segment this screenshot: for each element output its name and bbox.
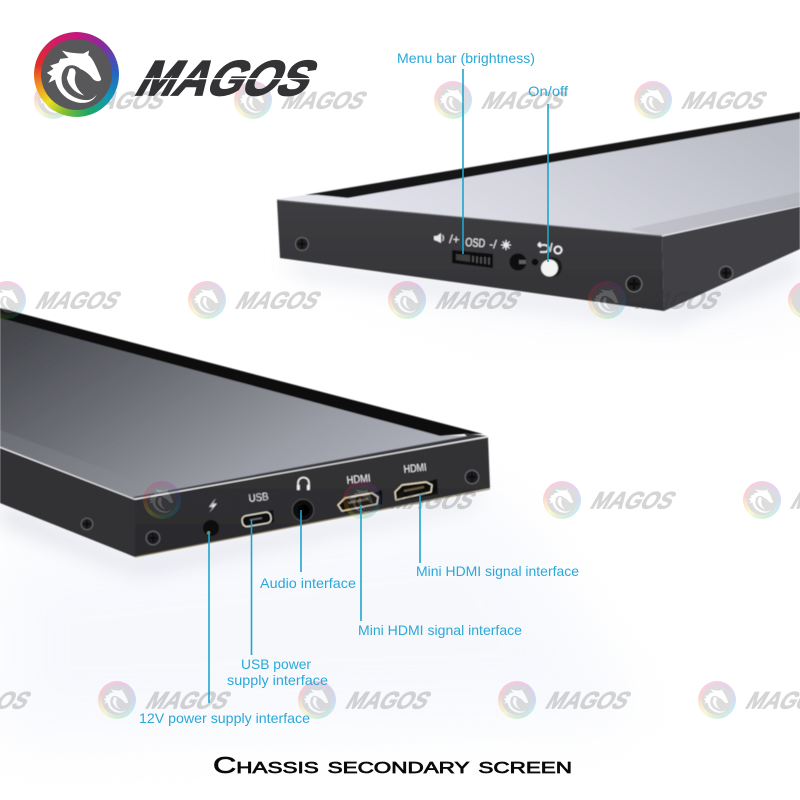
USB label: USB xyxy=(248,491,269,505)
title: Chassis secondary screen xyxy=(213,752,572,778)
top device: black bezel strip xyxy=(305,112,800,198)
watermark row 1, logo 4: MAGOS xyxy=(677,88,772,114)
watermark row 1, logo 2 xyxy=(234,81,372,119)
micro USB port xyxy=(241,510,274,528)
screw left xyxy=(146,531,160,545)
watermark row 4, logo 2: MAGOS xyxy=(141,688,236,714)
bottom device: corner frame xyxy=(133,433,487,499)
callout: USB power: USB power xyxy=(241,656,311,672)
mini HDMI port right xyxy=(395,479,438,501)
watermark row 3, logo 2 xyxy=(343,481,481,519)
minus slash text: -/ xyxy=(489,237,498,252)
callout: audio: Audio interface xyxy=(260,575,356,591)
watermark row 3, logo 2: MAGOS xyxy=(386,488,481,514)
callout: USB power: supply interface xyxy=(227,672,328,688)
OSD slider wheel xyxy=(452,250,493,268)
top device xyxy=(277,112,800,311)
audio jack xyxy=(291,498,315,522)
callout: mini HDMI 1: Mini HDMI signal interface xyxy=(358,622,522,638)
watermark row 3, logo 1 xyxy=(143,481,281,519)
HDMI label left: HDMI xyxy=(346,473,371,487)
background tint xyxy=(0,220,800,740)
bottom device xyxy=(0,308,490,557)
top device: right side face xyxy=(662,205,800,311)
bottom device: textured edge band xyxy=(0,430,146,499)
watermark row 4, logo 3 xyxy=(298,681,436,719)
top device: screw middle xyxy=(625,275,643,293)
watermark row 4, logo 4 xyxy=(498,681,636,719)
bottom device: left side face xyxy=(0,448,135,557)
watermark row 1, logo 1 xyxy=(34,88,172,119)
callout: on/off: On/off xyxy=(528,83,568,99)
icon: volume xyxy=(434,233,444,243)
callout: USB power xyxy=(227,520,328,688)
OSD text: OSD xyxy=(465,235,486,250)
logo horse and wordmark: MAGOS xyxy=(127,51,328,106)
watermark row 1, logo 1: MAGOS xyxy=(77,88,172,114)
watermark row 1, logo 2: MAGOS xyxy=(277,88,372,114)
callout: 12V power: 12V power supply interface xyxy=(139,710,310,726)
icon: return and power xyxy=(538,242,562,254)
bottom device: glass surface xyxy=(0,316,467,499)
logo horse and wordmark xyxy=(46,50,328,106)
watermark row 2, logo 1 xyxy=(0,281,126,319)
watermark row 3, logo 4 xyxy=(743,481,800,519)
bottom device: edge highlights xyxy=(0,437,488,499)
top device: edge highlights xyxy=(662,206,800,236)
watermark row 3, logo 3 xyxy=(543,481,681,519)
brand logo xyxy=(34,32,328,117)
screw side xyxy=(81,518,93,530)
12V jack xyxy=(203,520,219,536)
top device: front face xyxy=(277,200,664,311)
pinhole xyxy=(532,259,538,265)
watermark row 2, logo 5 xyxy=(788,282,800,318)
watermark row 1, logo 4 xyxy=(634,81,772,119)
watermark row 4, logo 2 xyxy=(98,681,236,719)
watermark row 2, logo 4 xyxy=(588,281,726,319)
top device: screw left xyxy=(296,238,308,250)
watermark row 3, logo 1: MAGOS xyxy=(186,488,281,514)
logo colour ring xyxy=(34,32,119,117)
bottom device: black bezel strip xyxy=(0,308,483,436)
icon: power bolt xyxy=(209,498,217,513)
HDMI label right: HDMI xyxy=(403,462,427,476)
watermark row 2, logo 2: MAGOS xyxy=(231,288,326,314)
watermark row 4, logo 5 xyxy=(698,681,800,719)
watermark row 2, logo 4: MAGOS xyxy=(631,288,726,314)
icon: brightness sun xyxy=(501,240,511,250)
callout: audio xyxy=(260,510,356,591)
callout: menu bar: Menu bar (brightness) xyxy=(397,50,535,66)
watermark row 3, logo 3: MAGOS xyxy=(586,488,681,514)
top device: textured edge band xyxy=(630,192,800,236)
screw right xyxy=(465,470,479,484)
top device: glass surface xyxy=(277,112,800,236)
bottom device: front face xyxy=(135,437,490,557)
icon: headphones xyxy=(297,478,310,490)
top device: screw right xyxy=(719,266,733,280)
audio jack xyxy=(510,254,526,270)
callout: mini HDMI 2: Mini HDMI signal interface xyxy=(416,563,579,579)
watermark row 4, logo 3: MAGOS xyxy=(341,688,436,714)
watermark row 1, logo 3 xyxy=(434,81,572,119)
watermark row 2, logo 2 xyxy=(188,281,326,319)
watermark row 4, logo 4: MAGOS xyxy=(541,688,636,714)
mini HDMI port left xyxy=(338,490,382,513)
power button xyxy=(541,257,562,277)
watermark row 2, logo 1: MAGOS xyxy=(31,288,126,314)
watermark row 1, logo 3: MAGOS xyxy=(477,88,572,114)
watermark row 2, logo 3: MAGOS xyxy=(431,288,526,314)
OSD printed labels: /+ xyxy=(449,232,460,247)
watermark row 2, logo 3 xyxy=(388,281,526,319)
